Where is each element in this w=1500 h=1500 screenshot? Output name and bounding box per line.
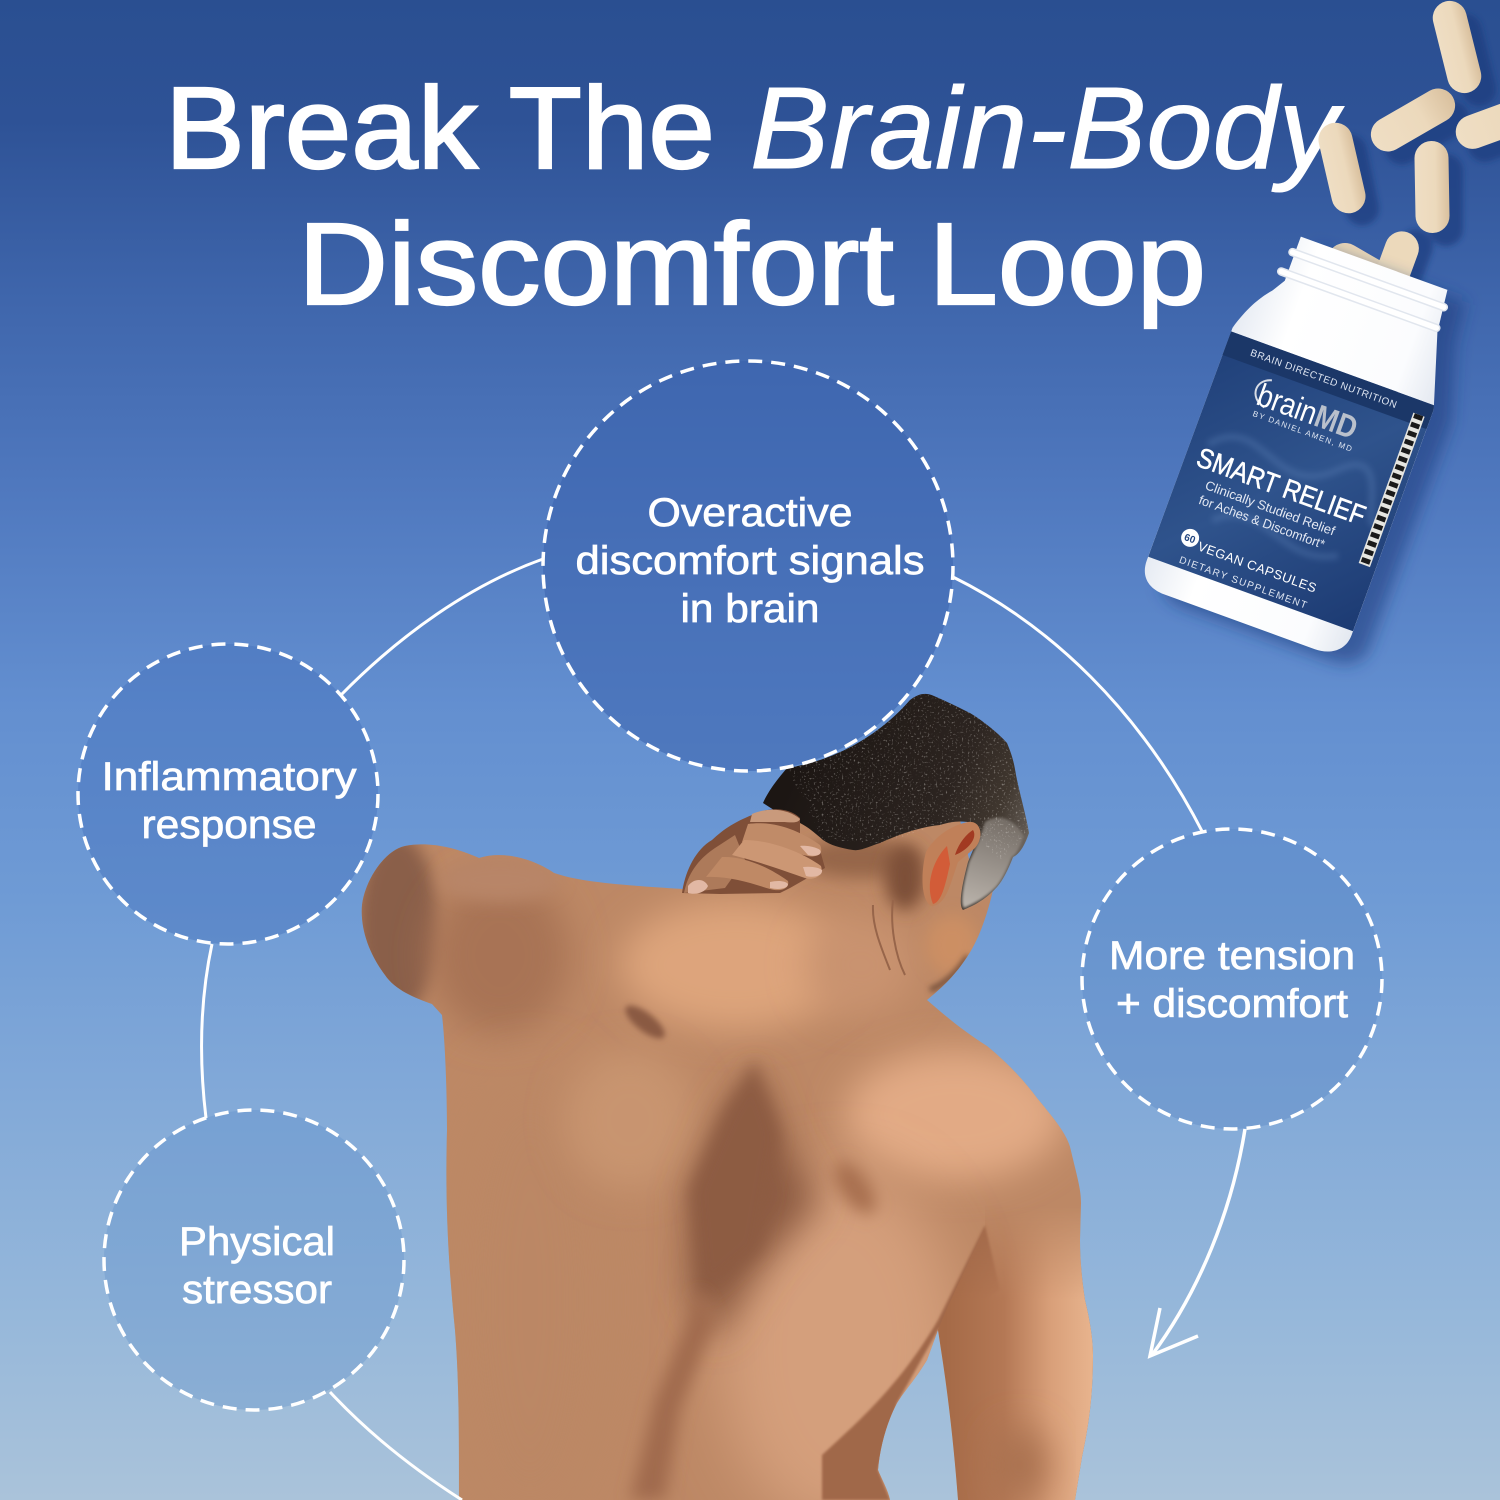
circle: physical stressor: stressor	[182, 1268, 332, 1312]
circle: more tension and discomfort: More tension	[1109, 934, 1355, 978]
bottle body	[1138, 225, 1474, 659]
bottle label text: for Aches & Discomfort*	[1197, 492, 1327, 552]
circle: physical stressor	[104, 1110, 404, 1410]
bottle label text: BY DANIEL AMEN, MD	[1251, 409, 1353, 454]
bottle neck threads	[1277, 246, 1448, 332]
circle: overactive discomfort signals: in brain	[680, 587, 820, 631]
capsules falling from bottle	[1315, 0, 1500, 313]
bottle label	[1144, 330, 1439, 633]
title: Discomfort Loop	[298, 199, 1206, 329]
circle: inflammatory response: response	[142, 803, 316, 847]
circle: overactive discomfort signals	[543, 361, 953, 771]
bottle label text: SMART RELIEF	[1193, 442, 1370, 531]
ear	[922, 822, 980, 906]
neck shading	[800, 838, 920, 878]
circle: inflammatory response: Inflammatory	[102, 755, 356, 799]
circle: overactive discomfort signals: discomfort signals	[576, 539, 924, 583]
circle: inflammatory response	[78, 644, 378, 944]
loop connector arcs	[202, 559, 1203, 1500]
torso, neck and arms	[362, 822, 1093, 1500]
circle: more tension and discomfort: + discomfort	[1116, 982, 1348, 1026]
circle: physical stressor: Physical	[179, 1220, 335, 1264]
central back shadow	[688, 1070, 820, 1340]
bottle label text: brainMD	[1252, 377, 1362, 446]
right arm	[938, 1203, 1093, 1500]
hand on neck	[682, 809, 825, 894]
bottle label text: BRAIN DIRECTED NUTRITION	[1249, 348, 1398, 411]
circle: overactive discomfort signals: Overactive	[648, 491, 852, 535]
bottle label text: 60	[1182, 532, 1197, 547]
title: Break The	[165, 63, 715, 193]
hair	[763, 694, 1029, 910]
title	[165, 63, 1344, 329]
arrow to body	[1150, 1129, 1245, 1356]
bottle label text	[1161, 343, 1406, 620]
bottle label text: DIETARY SUPPLEMENT	[1178, 555, 1308, 611]
bottle label text: VEGAN CAPSULES	[1196, 539, 1319, 596]
armpit shadow band	[822, 1225, 1000, 1500]
circle: more tension and discomfort	[1082, 829, 1382, 1129]
bottle label text: Clinically Studied Relief	[1203, 477, 1337, 539]
product bottle: Smart Relief	[1144, 236, 1468, 671]
bottle shadow	[1156, 237, 1492, 671]
title: Brain-Body	[750, 63, 1344, 193]
photo: man holding his neck	[340, 680, 1120, 1500]
